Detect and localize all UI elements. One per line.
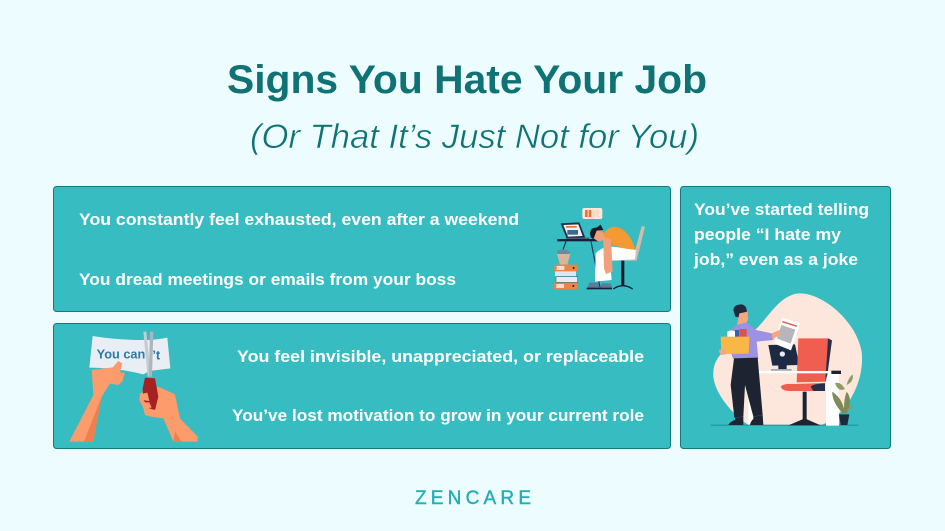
text: lost motivation: You’ve lost motivation to grow in your current role xyxy=(232,407,644,425)
text: telling people: You’ve started telling xyxy=(694,201,869,219)
text: telling people: job,” even as a joke xyxy=(693,251,858,269)
text: telling people xyxy=(693,201,869,269)
icon: person leaving desk with box xyxy=(711,293,862,426)
panel: invisible and motivation xyxy=(54,324,670,448)
text: telling people: people “I hate my xyxy=(694,226,842,244)
title: Signs You Hate Your Job xyxy=(227,58,707,102)
icon: exhausted worker at desk xyxy=(554,208,645,289)
panel: telling people xyxy=(680,186,890,448)
icon: hands cutting paper xyxy=(69,332,198,442)
logo: Zencare: ZENCARE xyxy=(415,488,531,509)
icon: hands cutting paper: You can xyxy=(97,346,145,361)
text: invisible: You feel invisible, unappreciated, or replaceable xyxy=(237,348,644,366)
subtitle: (Or That It’s Just Not for You) xyxy=(250,118,699,156)
panel: exhaustion and dread xyxy=(54,186,670,312)
text: dread meetings: You dread meetings or emails from your boss xyxy=(79,271,456,289)
text: exhausted: You constantly feel exhausted, even after a weekend xyxy=(79,211,519,229)
icon: hands cutting paper: ’t xyxy=(152,348,161,363)
